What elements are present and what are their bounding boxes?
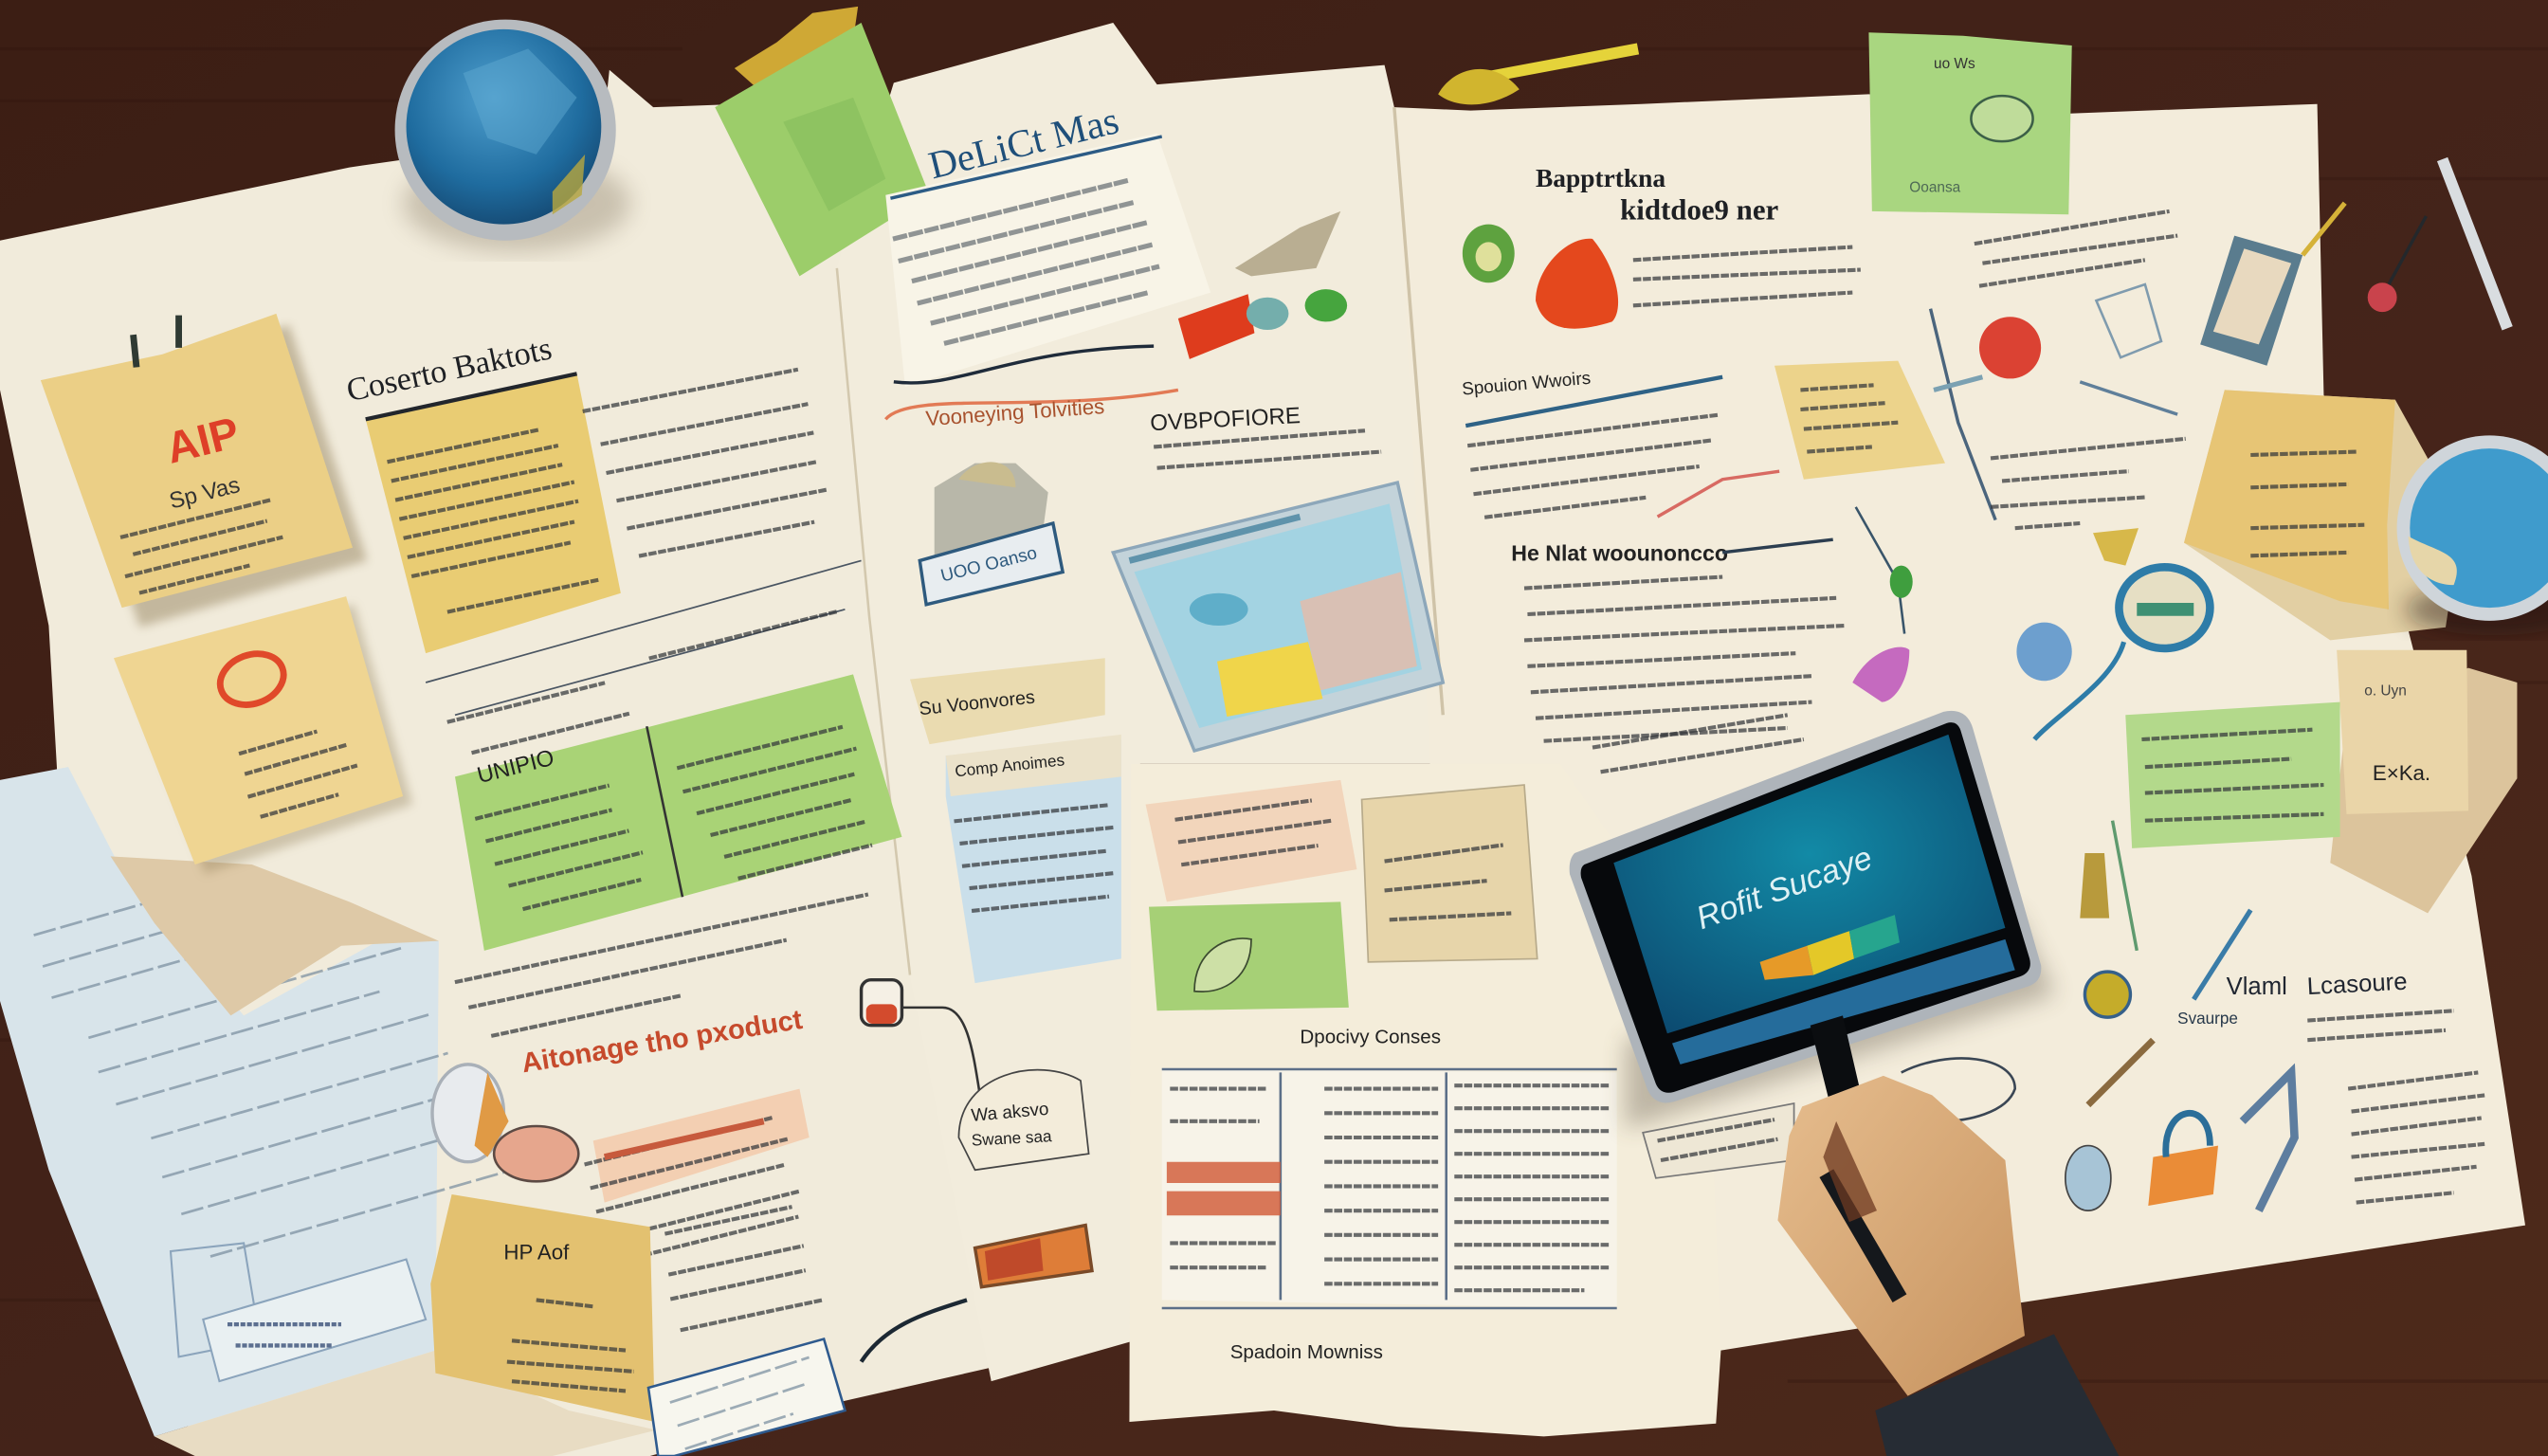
orange underlined heading: [885, 390, 1178, 430]
small blue sketched card: [648, 1339, 845, 1456]
yellow sticky note: AIP: [41, 314, 367, 628]
middle heading and text: OVBPOFIORE: [1150, 403, 1301, 436]
right page heading: Bapptrtkna: [1536, 164, 1665, 192]
globe paperweight top: [395, 20, 630, 252]
orange underlined heading: Vooneying Tolvities: [925, 394, 1105, 430]
top centre text panel: [885, 98, 1210, 387]
right column small icons: [2080, 821, 2250, 1105]
hand holding stylus: [1777, 1076, 2119, 1456]
yellow sticky note bottom left: [430, 1194, 655, 1422]
yellow sticky note: red loop: [114, 596, 412, 874]
paper: pale blue sheet: [0, 767, 657, 1456]
paper: bottom centre page: [1129, 764, 1720, 1436]
peach text box: [585, 1089, 810, 1264]
right text with heading: Svaurpe: [2177, 1009, 2238, 1028]
yellow text panel: [366, 373, 621, 653]
green table panel: [455, 674, 901, 951]
right text with heading: [2177, 969, 2454, 1040]
arrow: [862, 1300, 967, 1362]
stylus: [1827, 1174, 1900, 1299]
tan note right: [2337, 650, 2468, 814]
tablet title: Rofit Sucaye: [1692, 840, 1877, 937]
green sticky note top right: [1868, 32, 2072, 214]
paper: tan curl over blue sheet: [111, 856, 439, 1015]
footer caption: Spadoin Mowniss: [1230, 1341, 1383, 1363]
yellow pen top: [1438, 48, 1638, 104]
orange heading with icon: [519, 980, 983, 1113]
tan labelled box: [910, 658, 1105, 744]
blue text panel: Comp Anoimes: [954, 750, 1065, 780]
green leaf note: [1149, 901, 1349, 1010]
tan pinned note: [1362, 785, 1538, 962]
tan note right: E×Ka.: [2373, 761, 2430, 785]
tan note right: o. Uyn: [2364, 683, 2407, 700]
bubble note: Wa aksvo: [971, 1099, 1049, 1125]
orange label: [975, 1226, 1092, 1287]
paper: large left page: [0, 70, 1146, 1456]
box illustration: [919, 462, 1063, 605]
bubble note: Swane saa: [971, 1126, 1052, 1150]
right page heading: kidtdoe9 ner: [1620, 193, 1779, 226]
red block icon with blobs: [1178, 211, 1347, 359]
top centre text panel: DeLiCt Mas: [924, 98, 1123, 187]
pin: [2368, 216, 2426, 312]
yellow sticky note bottom left: HP Aof: [503, 1241, 570, 1265]
tablet device: [1570, 711, 2056, 1129]
green sticky note top: [715, 23, 930, 276]
green and red blob icons: [1463, 225, 1618, 329]
heading and long text block: [1511, 539, 1845, 741]
centre-bottom table: Dpocivy Conses: [1300, 1027, 1441, 1048]
sketch panels on blue sheet: [171, 1243, 426, 1381]
yellow sticky note right: [2184, 390, 2395, 610]
diagram lines below yellow panel: [426, 560, 862, 756]
yellow tape behind green note: [735, 7, 858, 94]
green sticky note top right: uo Ws: [1934, 56, 1975, 72]
yellow mini note: [1774, 361, 1945, 480]
left text group with heading: Spouion Wwoirs: [1461, 368, 1592, 399]
text strip beneath green panel: [455, 895, 881, 1041]
right text with heading: Vlaml: [2227, 974, 2287, 1000]
paper: top centre page: [837, 23, 1449, 1381]
blue text panel: [946, 735, 1121, 983]
middle heading and text: [1150, 403, 1381, 468]
section heading: left column: Coserto Baktots: [343, 330, 555, 409]
tablet colour bar: [1760, 915, 1900, 980]
heading and long text block: He Nlat woounoncco: [1511, 540, 1728, 565]
vertical connector and red circle: [1931, 309, 2041, 520]
torn tan note bottom right: [2330, 668, 2517, 913]
egg and pink circle icons: [432, 1065, 578, 1181]
label: AIP: AIP: [161, 408, 244, 473]
text block bottom middle: [657, 1205, 824, 1331]
blue circle icons: [2016, 528, 2210, 739]
text block bottom right: [2348, 1072, 2484, 1203]
torn tan paper right: [2184, 390, 2462, 640]
peach callout: [1146, 780, 1356, 901]
right page heading: [1536, 164, 1779, 226]
orange heading with icon: Aitonage tho pxoduct: [519, 1005, 805, 1079]
pink scribble: [1658, 471, 1779, 517]
text block right of yellow panel: [583, 369, 832, 561]
centre-bottom table: [1162, 1027, 1617, 1308]
phone icon: [2200, 203, 2345, 366]
blue window illustration: [1113, 482, 1443, 751]
right page intro text: [1633, 247, 1861, 305]
box illustration: UOO Oanso: [938, 542, 1039, 586]
bubble note: [958, 1070, 1089, 1170]
globe right: [2397, 435, 2548, 635]
green sticky note top right: Ooansa: [1909, 179, 1961, 195]
left text group with heading: [1461, 368, 1726, 519]
sleeve: [1875, 1334, 2119, 1456]
padlock and lamp icons: [2066, 1072, 2295, 1210]
white pen: [2443, 159, 2507, 328]
yellow sticky note: AIP: Sp Vas: [167, 472, 243, 515]
hand: [1777, 1076, 2025, 1396]
text bubble under tablet: [1643, 1058, 2015, 1178]
small text right of middle: [1592, 715, 1804, 772]
tree and pink flower icon: [1852, 507, 1913, 702]
right text with heading: Lcasoure: [2306, 969, 2408, 1000]
right column text: [1975, 211, 2186, 528]
tan labelled box: Su Voonvores: [919, 687, 1036, 719]
green text panel right: [2125, 702, 2340, 848]
paper: right page: [1394, 94, 2525, 1351]
green table panel: UNIPIO: [475, 745, 556, 789]
